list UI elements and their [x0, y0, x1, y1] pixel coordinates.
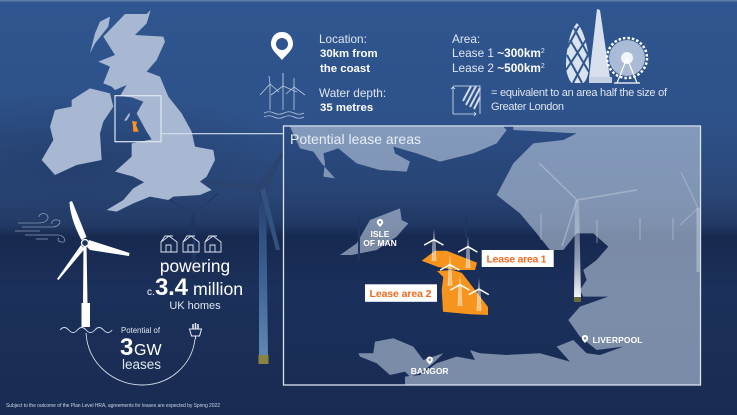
map: inset locator box — [115, 96, 161, 142]
panel: potential lease areas — [284, 126, 700, 385]
text: potential of 3GW: leases — [122, 357, 161, 372]
background photo: large turbine — [173, 152, 284, 364]
text: area: 2 — [541, 63, 545, 70]
lease map: land masses — [290, 127, 700, 385]
text: potential of 3GW — [120, 326, 162, 372]
map: lease location marker — [132, 121, 139, 132]
text: location and depth: the coast — [320, 63, 370, 75]
text: area: Lease 1 ~300km — [452, 46, 541, 60]
text: potential of 3GW: Potential of — [121, 326, 161, 335]
place: Isle of Man — [363, 219, 397, 248]
text: location and depth: 30km from — [320, 48, 378, 60]
text: area equivalent — [491, 87, 668, 113]
connector line — [161, 133, 283, 135]
label: lease area 1 — [482, 250, 554, 267]
icon: offshore turbines — [260, 73, 305, 118]
text: powering homes: 3.4 — [155, 274, 189, 301]
text: area: Area: — [452, 32, 480, 46]
text: location and depth: Location: — [319, 32, 367, 46]
icon: wave and cable arc — [60, 328, 195, 385]
place: Isle of Man: OF MAN — [363, 238, 397, 248]
panel heading: Potential lease areas — [290, 131, 421, 147]
icon: wind lines — [15, 214, 65, 242]
text: location and depth: 35 metres — [320, 102, 373, 114]
text: area equivalent: = equivalent to an area half the size of — [491, 87, 668, 99]
text: area — [452, 32, 545, 75]
lease area 1 — [422, 251, 477, 270]
text: powering homes: powering — [160, 256, 230, 276]
label: lease area 2: Lease area 2 — [370, 288, 432, 300]
lease map: turbines — [424, 229, 489, 311]
icon: area square — [451, 86, 480, 116]
footnote: Subject to the outcome of the Plan Level HRA, agreements for leases are expected by Spring 2022 — [6, 403, 220, 409]
text: powering homes: UK homes — [169, 300, 221, 312]
lease map: background turbines — [359, 163, 698, 302]
text: area equivalent: Greater London — [491, 101, 564, 113]
text: powering homes: million — [193, 279, 243, 299]
text: location and depth — [319, 32, 386, 114]
place: Isle of Man: ISLE — [371, 229, 390, 239]
text: powering homes: c. — [147, 287, 155, 298]
place: Bangor: BANGOR — [411, 366, 449, 376]
icon: large white turbine — [57, 201, 130, 327]
icon: location pin — [271, 32, 293, 60]
icon: plug — [190, 323, 202, 339]
place: Liverpool: LIVERPOOL — [592, 335, 642, 345]
icon: London skyline — [566, 9, 647, 83]
text: powering homes — [147, 256, 243, 312]
lease area 2 — [437, 270, 488, 315]
map: UK and Ireland — [42, 10, 215, 212]
text: area: 2 — [541, 48, 545, 55]
icon: houses — [161, 236, 221, 252]
place: Bangor — [411, 356, 449, 376]
text: location and depth: Water depth: — [319, 86, 386, 100]
label: lease area 1: Lease area 1 — [486, 254, 547, 266]
background photo: distant turbine — [168, 193, 218, 273]
text: potential of 3GW: GW — [134, 342, 162, 359]
label: lease area 2 — [365, 284, 437, 302]
text: area: Lease 2 ~500km — [452, 61, 541, 75]
panel border — [284, 126, 700, 385]
text: potential of 3GW: 3 — [120, 334, 133, 361]
